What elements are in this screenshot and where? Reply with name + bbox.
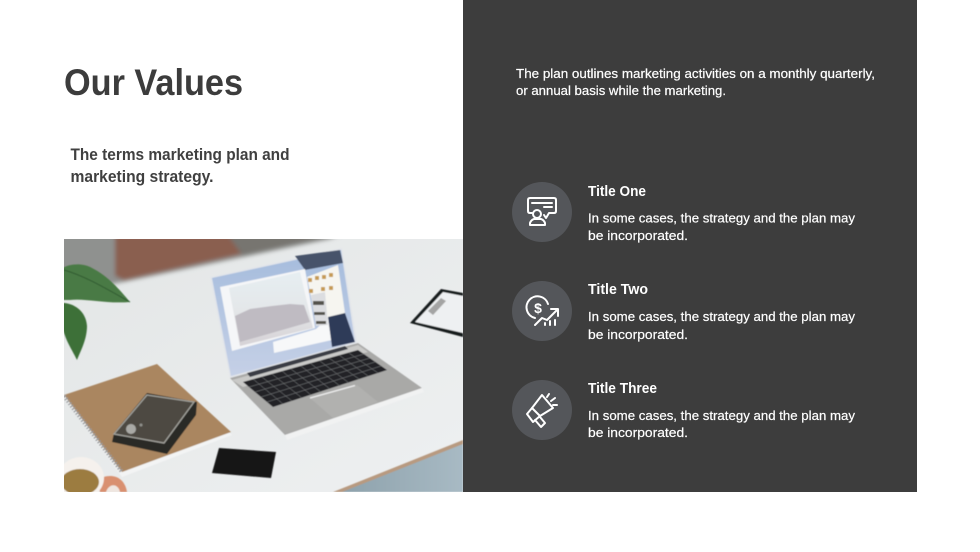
mug — [97, 476, 127, 492]
icon: dollar and growth chart: $ — [534, 300, 542, 316]
body: be incorporated. — [588, 327, 688, 342]
heading: Title Two — [588, 282, 648, 298]
item: title one — [512, 182, 856, 243]
intro text — [516, 66, 875, 98]
laptop — [230, 343, 422, 435]
subtitle text: marketing strategy. — [70, 168, 214, 186]
body — [588, 408, 856, 440]
clipboard — [410, 289, 463, 337]
body: be incorporated. — [588, 425, 688, 440]
panel: dark background — [463, 0, 917, 492]
item: title three — [512, 380, 856, 440]
subtitle text: The terms marketing plan and — [70, 146, 290, 164]
intro text: The plan outlines marketing activities on a monthly quarterly, — [516, 66, 875, 81]
notebook — [64, 397, 230, 476]
body: be incorporated. — [588, 228, 688, 243]
icon: presenter with screen — [512, 182, 572, 242]
body: In some cases, the strategy and the plan may — [588, 408, 856, 423]
phone — [212, 448, 276, 478]
body — [588, 210, 856, 243]
intro text: or annual basis while the marketing. — [516, 83, 726, 98]
subtitle text — [70, 146, 290, 186]
heading: Title One — [588, 184, 646, 200]
photo: laptop on a white desk — [58, 235, 463, 499]
body: In some cases, the strategy and the plan may — [588, 210, 856, 226]
leaves — [60, 264, 130, 302]
title: Our Values — [64, 62, 243, 103]
heading: Title Three — [588, 381, 657, 397]
item: title two — [512, 281, 856, 342]
body — [588, 309, 856, 342]
body: In some cases, the strategy and the plan may — [588, 309, 856, 324]
icon: dollar and growth chart — [512, 281, 572, 341]
hard drive — [112, 393, 197, 454]
icon: megaphone — [512, 380, 572, 440]
